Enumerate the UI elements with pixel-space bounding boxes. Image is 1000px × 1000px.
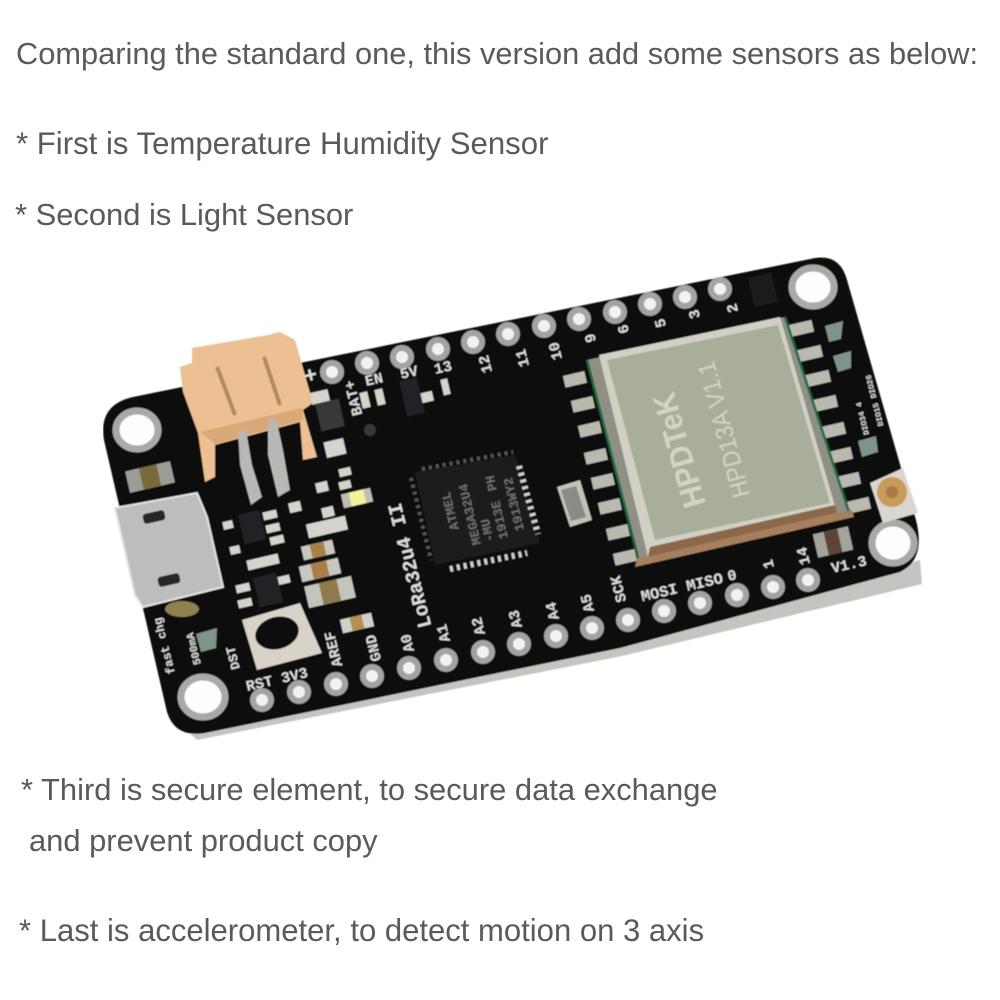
reset button <box>242 603 322 670</box>
silkscreen labels: 12 <box>476 353 497 375</box>
microcontroller chip: 1913WY2 <box>501 476 528 532</box>
silkscreen markers <box>196 321 878 652</box>
microcontroller chip: ATMEL <box>439 490 463 532</box>
silkscreen labels: BAT+ <box>342 378 367 417</box>
silkscreen labels: 5 <box>652 316 671 329</box>
silkscreen labels: 2 <box>724 301 743 314</box>
silkscreen labels: 3 <box>686 307 705 320</box>
silkscreen labels: 9 <box>582 331 601 344</box>
silkscreen labels: 500mA <box>185 631 205 666</box>
silkscreen labels: A5 <box>578 592 599 614</box>
silkscreen labels: DST <box>223 644 244 671</box>
silkscreen labels: AREF <box>322 629 347 668</box>
microcontroller chip: 1913E <box>488 499 512 540</box>
silkscreen labels: LoRa32u4 II <box>385 500 438 630</box>
text: last sensor: * Last is accelerometer, to detect motion on 3 axis <box>19 913 704 948</box>
board edge <box>167 560 922 740</box>
silkscreen labels: 13 <box>433 358 454 379</box>
micro USB port <box>115 493 223 617</box>
battery connector <box>180 332 317 505</box>
silkscreen labels: A0 <box>398 632 419 654</box>
small components <box>125 272 853 633</box>
microcontroller chip: -MU <box>478 517 498 543</box>
silkscreen labels: + <box>302 363 320 390</box>
silkscreen labels: 10 <box>546 340 567 362</box>
antenna connector <box>870 468 918 523</box>
silkscreen labels: 0 <box>726 567 739 586</box>
silkscreen labels: GND <box>363 633 386 663</box>
microcontroller chip: MEGA32U4 <box>456 482 485 546</box>
crystal <box>557 480 592 527</box>
silkscreen labels: A2 <box>469 615 490 637</box>
silkscreen labels <box>151 301 886 696</box>
radio module shield: HPDTeK <box>646 389 713 512</box>
silkscreen labels: DIO15 DIO26 <box>865 373 886 427</box>
silkscreen labels: EN <box>364 370 385 391</box>
microcontroller chip <box>411 452 540 569</box>
microcontroller chip: PH <box>483 474 501 492</box>
text: third sensor: * Third is secure element, to secure data exchange <box>21 772 718 807</box>
radio module shield: HPD13A V1.1 <box>693 358 756 501</box>
silkscreen labels: fast chg <box>151 616 179 675</box>
silkscreen labels: DIO34 4 <box>855 401 872 436</box>
silkscreen labels: 6 <box>615 322 634 335</box>
text: second sensor: * Second is Light Sensor <box>15 197 353 232</box>
text: third sensor continuation: and prevent product copy <box>29 823 378 858</box>
silkscreen labels: A4 <box>543 600 564 622</box>
heading: comparison intro: Comparing the standard one, this version add some sensors as below: <box>16 36 978 71</box>
silkscreen labels: V1.3 <box>830 553 869 578</box>
silkscreen labels: 14 <box>794 545 815 567</box>
status LED <box>341 488 373 508</box>
silkscreen labels: 11 <box>513 347 534 369</box>
PCB body <box>103 257 919 734</box>
silkscreen labels: MOSI MISO <box>639 570 725 606</box>
radio module pads <box>563 320 871 566</box>
mounting holes <box>116 268 914 717</box>
text: first sensor: * First is Temperature Humidity Sensor <box>16 126 548 161</box>
silkscreen labels: A3 <box>506 608 527 630</box>
radio module PCB <box>587 317 850 565</box>
silkscreen labels: RST 3V3 <box>245 665 310 696</box>
silkscreen labels: 1 <box>760 557 779 570</box>
top pin row <box>323 280 729 381</box>
radio module shield <box>599 317 837 557</box>
silkscreen labels: 5V <box>399 363 420 384</box>
silkscreen labels: A1 <box>434 622 455 644</box>
bottom pin row <box>253 571 817 709</box>
silkscreen labels: SCK <box>608 574 631 604</box>
